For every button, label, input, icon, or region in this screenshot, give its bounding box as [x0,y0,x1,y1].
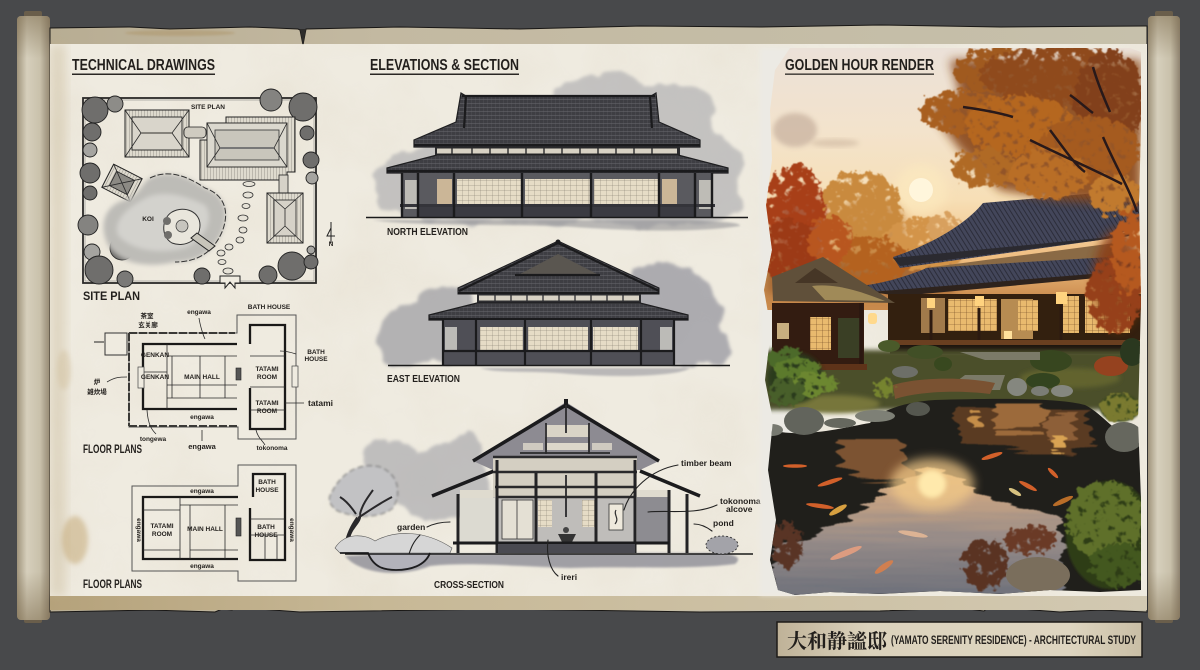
floor and ground [453,542,669,544]
room labels [135,479,295,570]
top right tree [920,45,1145,215]
clerestory band [477,294,641,303]
callouts: 茶室 [140,311,154,320]
room labels: MAIN HALL [187,526,223,533]
north arrow: N [329,241,334,248]
hearth hook and kettle [558,475,576,542]
torn paper edge [760,48,795,595]
labels with arrows: ireri [561,572,577,582]
callouts: 炉 [94,377,101,386]
site plan small label: SITE PLAN [191,104,225,111]
panel: elevations and section [329,57,761,591]
room labels [141,352,279,421]
sky [760,48,1145,310]
lower roofs [432,471,700,496]
lit shoji screens [948,296,1130,339]
connector [184,127,206,138]
panel: technical drawings [72,57,335,591]
upper roof [414,93,700,147]
room labels: ROOM [257,374,277,381]
walls [143,344,237,409]
garden tree [329,466,398,541]
building: bath house [267,175,303,243]
labels with arrows: garden [397,522,425,532]
garden shrubs [335,533,452,553]
panel: golden hour render [755,45,1154,600]
clerestory [925,244,1113,269]
koi pond: KOI [142,216,154,223]
wall [402,173,712,217]
room labels: TATAMI [255,400,279,407]
interior [460,490,668,542]
callouts: engawa [188,442,217,451]
house reflection [836,405,1095,480]
posts [458,460,687,553]
sun [908,178,934,214]
callouts [87,304,333,452]
clerestory band [435,147,680,156]
right tree foliage [1094,230,1142,330]
pavilion body [772,303,877,370]
arched bridge [893,379,995,399]
shrubs mid garden [878,338,1144,389]
room labels: engawa [190,563,214,570]
label: east elevation: EAST ELEVATION [387,374,460,385]
background trees [764,255,954,295]
gate [220,276,240,288]
site plan drawing [78,89,335,288]
heading: elevations and section: ELEVATIONS & SECTION [370,57,519,74]
label: cross section: CROSS-SECTION [434,580,504,591]
room labels: GENKAN [141,374,169,381]
painting [755,45,1154,600]
callouts: engawa [187,309,211,316]
building: tea pavilion [102,164,142,202]
north elevation [366,74,748,238]
room labels: TATAMI [255,366,279,373]
ink wash [375,74,742,225]
label: north elevation: NORTH ELEVATION [387,227,468,238]
stone path [960,352,1040,390]
callouts: BATH [307,349,325,356]
callouts: tongewa [140,436,167,443]
bush [706,536,738,554]
callouts: BATH HOUSE [248,304,291,311]
main roof and truss [473,402,659,470]
callouts: tatami [308,398,333,408]
building: north pavilion [125,110,189,157]
gable infill [520,254,597,274]
title plate [777,622,1142,657]
room labels: engawa [288,518,295,542]
foreground rock [1006,557,1070,593]
room labels: HOUSE [254,532,278,539]
room labels: BATH [257,524,275,531]
site plan trees [78,89,319,287]
main house upper roof [893,186,1141,268]
floor plan two [132,465,296,581]
room labels: ROOM [152,531,172,538]
right foreground shrubs [1066,394,1154,589]
callouts: tokonoma [256,445,288,452]
main house lower roof [867,254,1141,292]
cross section [329,399,761,591]
pavilion thatched roof [772,257,895,303]
koi fish [783,451,1074,576]
sky reflection pool [772,463,1062,595]
garden lawn [762,350,1147,410]
labels with arrows: alcove [726,504,753,514]
label: site plan: SITE PLAN [83,291,140,303]
stepping stones [217,182,255,274]
pond water [762,399,1145,600]
room labels: TATAMI [150,523,174,530]
garden pond [340,553,430,570]
ground line [366,216,748,218]
east elevation [378,240,731,385]
left foreground rocks [761,402,930,436]
label: floor plans: FLOOR PLANS [83,444,142,456]
room labels: engawa [135,518,142,542]
gable roof [458,241,659,294]
room labels: GENKAN [141,352,169,359]
lower roof [387,155,728,173]
ink wash [378,287,480,365]
ink wash [362,433,500,520]
room labels: BATH [258,479,276,486]
beams [493,457,637,497]
callouts: HOUSE [304,356,328,363]
building: main hall [200,117,295,180]
koi pond [103,174,226,265]
heading: golden hour render: GOLDEN HOUR RENDER [785,57,934,74]
room labels: engawa [190,488,214,495]
main house wall [888,294,1143,346]
room labels: engawa [190,414,214,421]
tree branches [963,67,1137,212]
door [502,500,533,539]
rocks [892,366,1073,397]
room labels: HOUSE [255,487,279,494]
deck [890,340,1145,345]
bridge [191,233,215,251]
room labels: MAIN HALL [184,374,220,381]
lower roof [429,303,688,320]
floor plan one [87,304,333,452]
labels with arrows [397,458,761,582]
scroll: left roller [17,11,50,623]
left foreground shrubs [767,347,896,406]
wall [443,320,674,365]
room labels: ROOM [257,408,277,415]
labels with arrows: pond [713,518,734,528]
hanging scroll [609,504,623,530]
callouts: 雑炊場 [87,387,107,396]
labels with arrows: timber beam [681,458,732,468]
labels with arrows: tokonoma [720,496,761,506]
north arrow [327,222,335,248]
heading: technical drawings: TECHNICAL DRAWINGS [72,57,215,74]
scroll: right roller [1148,11,1180,623]
lanterns and posts [927,292,1067,339]
sun glint [890,458,974,510]
callouts: 玄关廊 [138,320,158,329]
shoji windows [538,500,595,527]
tree reflections [772,521,1056,589]
label: floor plans second: FLOOR PLANS [83,579,142,591]
kanji title: 大和静謐邸 [787,630,887,653]
